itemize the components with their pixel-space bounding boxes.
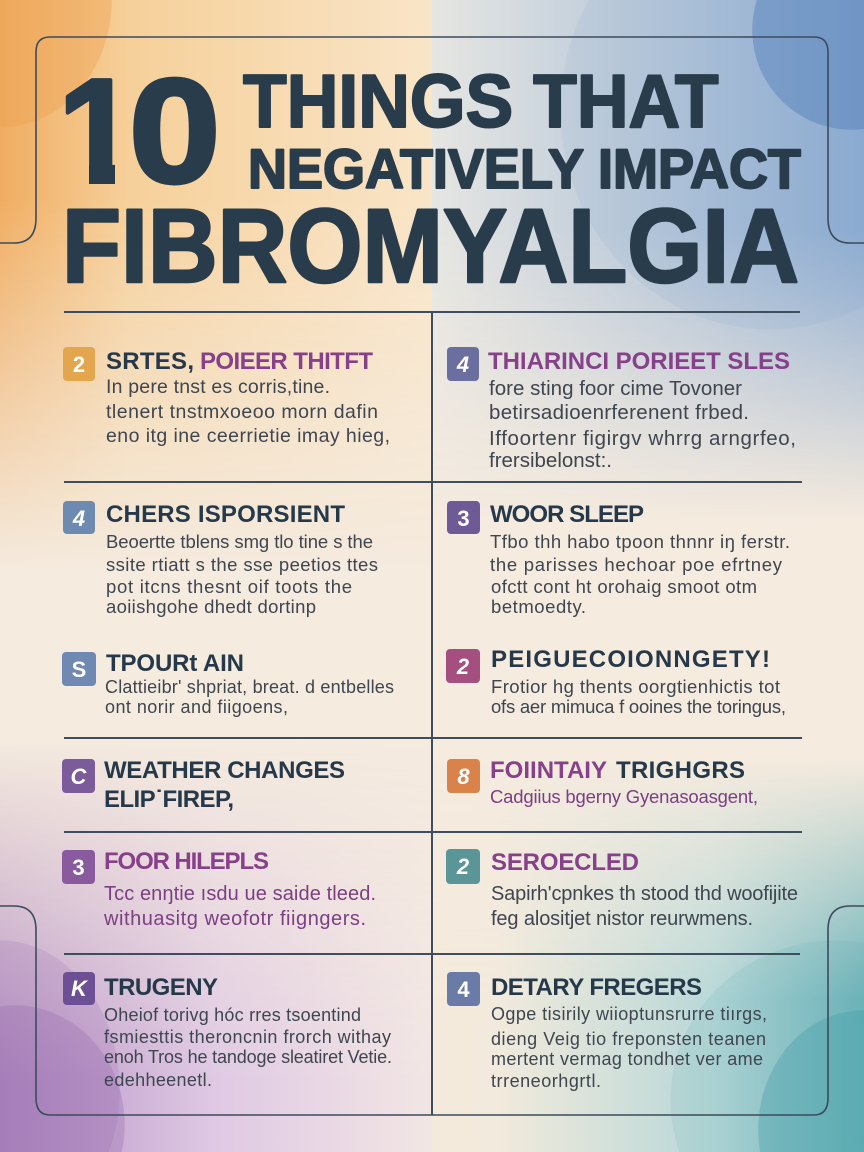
item: left 3: ont norir and fiigoens, <box>105 697 288 717</box>
item: right 2 <box>447 501 790 617</box>
item: right 5: feg alositjet nistor reurwmens. <box>491 908 753 930</box>
item: left 5: 3 <box>72 855 85 880</box>
item: right 2: WOOR SLEEP <box>490 501 644 528</box>
item: right 2: betmoedty. <box>491 596 586 617</box>
item: right 3: Frotior hg thents oorgtienhictis tot <box>491 676 780 697</box>
item: left 5 <box>62 848 376 930</box>
title: 0 <box>129 49 220 214</box>
item: left 6: enoh Tros he tandoge sleatiret Vetie. <box>104 1047 392 1067</box>
title: 1 <box>58 48 137 214</box>
item: left 2: aoiishgohe dhedt dortinp <box>106 596 316 617</box>
item: right 6: trreneorhgrtl. <box>491 1071 601 1091</box>
item: right 1: betirsadioenrferenent frbed. <box>489 401 749 424</box>
item: right 2: the parisses hechoar poe efrtney <box>490 554 783 575</box>
item: left 4: WEATHER CHANGES <box>104 757 345 784</box>
item: left 4: ELIP˙FIREP, <box>104 786 234 813</box>
item: right 2: 3 <box>457 506 470 531</box>
title: NEGATIVELY IMPACT <box>248 137 801 200</box>
item: right 3 <box>446 646 786 717</box>
item: left 5: FOOR HILEPLS <box>104 848 269 875</box>
item: right 3: PEIGUECOIONNGETY! <box>491 646 770 673</box>
item: left 6: Oheiof torivg hóc rres tsoentind <box>104 1005 361 1025</box>
item: left 6: fsmiesttis theroncnin frorch withay <box>104 1027 391 1047</box>
item: right 6: Ogpe tisirily wiioptunsrurre tiırgs, <box>491 1004 767 1024</box>
item: left 2 <box>63 501 378 617</box>
item: left 2: CHERS ISPORSIENT <box>106 501 345 528</box>
item: left 2: pot itcns thesnt oif toots the <box>106 576 352 597</box>
item: left 5: withuasitg weofotr fiigngers. <box>103 908 366 930</box>
item: right 1: 4 <box>456 352 469 377</box>
item: left 1: eno itg ine ceerrietie imay hieg, <box>106 425 390 447</box>
title: FIBROMYALGIA <box>62 188 799 305</box>
item: left 1: POIEER THITFT <box>200 348 373 375</box>
item: right 6: dieng Veig tio freponsten teanen <box>491 1029 766 1049</box>
item: right 1 <box>447 347 796 472</box>
item: right 5 <box>446 849 798 930</box>
item: right 5: SEROECLED <box>491 849 639 876</box>
item: right 6: mertent vermag tondhet ver ame <box>491 1049 763 1069</box>
item: right 6 <box>447 972 767 1091</box>
item: right 4: FOIINTAIY <box>490 757 607 784</box>
item: left 6: edehheenetl. <box>104 1070 212 1090</box>
item: left 1: SRTES, <box>106 348 194 375</box>
item: left 4: C <box>71 764 88 789</box>
title: THINGS THAT <box>243 59 719 143</box>
item: left 2: Beoertte tblens smg tlo tine s the <box>106 531 373 552</box>
item: left 3: Clattieibr' shpriat, breat. d entbelles <box>105 677 394 697</box>
item: right 2: ofctt cont ht orohaig smoot otm <box>491 576 757 597</box>
item: right 1: fore sting foor cime Tovoner <box>489 377 742 400</box>
item: right 4: 8 <box>457 764 470 789</box>
item: left 6: K <box>71 976 89 1001</box>
item: left 1: tlenert tnstmxoeoo morn dafin <box>106 401 378 423</box>
item: right 6: DETARY FREGERS <box>491 974 702 1001</box>
item: left 5: Tcc enŋtie ısdu ue saide tleed. <box>104 883 376 905</box>
item: right 6: 4 <box>457 977 470 1002</box>
item: right 2: Tfbo thh habo tpoon thnnr iŋ ferstr. <box>490 531 790 552</box>
item: right 3: 2 <box>456 654 470 679</box>
item: left 1: 2 <box>73 352 85 377</box>
item: right 1: frersibelonst:. <box>489 449 612 472</box>
item: right 1: THIARINCI PORIEET SLES <box>488 348 790 375</box>
item: left 6: TRUGENY <box>104 974 218 1001</box>
item: right 4 <box>447 757 758 807</box>
item: left 3 <box>62 650 394 717</box>
item: right 3: ofs aer mimuca f ooines the toringus, <box>491 696 786 717</box>
item: left 3: TPOURt AIN <box>106 650 244 677</box>
item: left 4 <box>62 757 345 813</box>
item: left 1 <box>63 347 390 447</box>
item: right 4: Cadgiius bgerny Gyenasoasgent, <box>490 786 758 807</box>
item: right 5: 2 <box>456 854 470 879</box>
item: left 2: ssite rtiatt s the sse peetios ttes <box>106 554 378 575</box>
item: left 6 <box>63 972 392 1090</box>
item: right 4: TRIGHGRS <box>616 757 745 784</box>
item: right 1: Iffoortenr figirgv whrrg arngrfeo, <box>489 427 796 450</box>
item: left 2: 4 <box>72 506 85 531</box>
title <box>66 73 802 284</box>
item: left 1: In pere tnst es corris,tine. <box>106 376 330 398</box>
item: left 3: S <box>72 657 86 682</box>
item: right 5: Sapirh'cpnkes th stood thd woofijite <box>491 883 798 905</box>
